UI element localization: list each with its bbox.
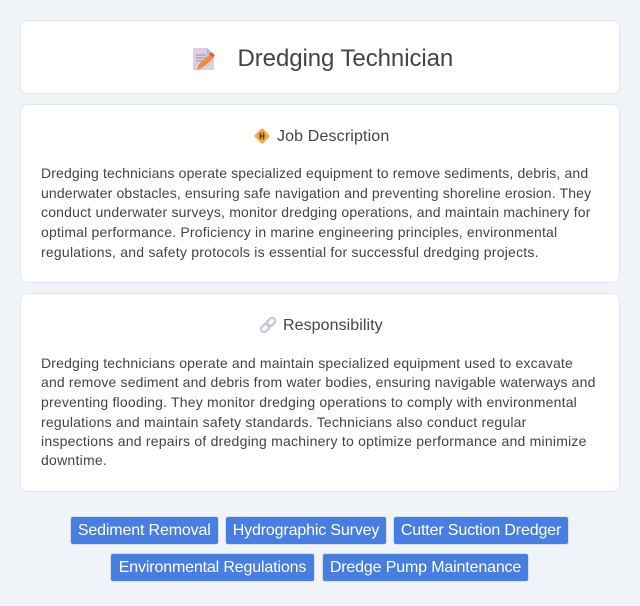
text: job description: Dredging technicians operate specialized equipment to remove sediments, debris, and	[41, 165, 588, 181]
icon: document with pencil	[193, 48, 215, 70]
text: job description: underwater obstacles, ensuring safe navigation and preventing shoreline erosion. They	[41, 185, 591, 201]
tag: cutter suction dredger: Cutter Suction Dredger	[401, 522, 561, 539]
tag: hydrographic survey	[225, 516, 387, 545]
text: job description: optimal performance. Proficiency in marine engineering principles, environmental	[41, 224, 557, 240]
icon: chain link	[260, 316, 276, 334]
text: job description: conduct underwater surveys, monitor dredging operations, and maintain machinery for	[41, 204, 591, 220]
text: responsibility	[41, 355, 596, 468]
tag: dredge pump maintenance: Dredge Pump Maintenance	[330, 559, 521, 576]
panel: job description	[20, 104, 620, 283]
heading: job description: Job Description	[277, 128, 389, 145]
tag: cutter suction dredger	[393, 516, 569, 545]
tag: hydrographic survey: Hydrographic Survey	[233, 522, 379, 539]
text: responsibility: preventing flooding. They monitor dredging operations to comply with environmental	[41, 394, 577, 410]
tag: environmental regulations	[110, 553, 315, 582]
heading: responsibility: Responsibility	[283, 317, 383, 334]
icon: road sign	[254, 128, 270, 144]
tag: dredge pump maintenance	[322, 553, 529, 582]
text: responsibility: inspections and repairs of dredging machinery to optimize performance and minimize	[41, 433, 587, 449]
panel: title card	[20, 20, 620, 94]
text: job description: regulations, and safety protocols is essential for successful dredging projects.	[41, 244, 539, 260]
text: responsibility: and remove sediment and debris from water bodies, ensuring navigable waterways and	[41, 374, 596, 390]
text: responsibility: Dredging technicians operate and maintain specialized equipment used to excavate	[41, 355, 573, 371]
tag: environmental regulations: Environmental Regulations	[119, 559, 306, 576]
title: Dredging Technician	[238, 45, 453, 72]
text: job description	[41, 165, 592, 260]
panel: responsibility	[20, 293, 620, 492]
text: responsibility: regulations and maintain safety standards. Technicians also conduct regular	[41, 414, 527, 430]
tag: sediment removal	[70, 516, 218, 545]
tag list	[70, 516, 569, 582]
tag: sediment removal: Sediment Removal	[78, 522, 211, 539]
text: responsibility: downtime.	[41, 452, 107, 468]
